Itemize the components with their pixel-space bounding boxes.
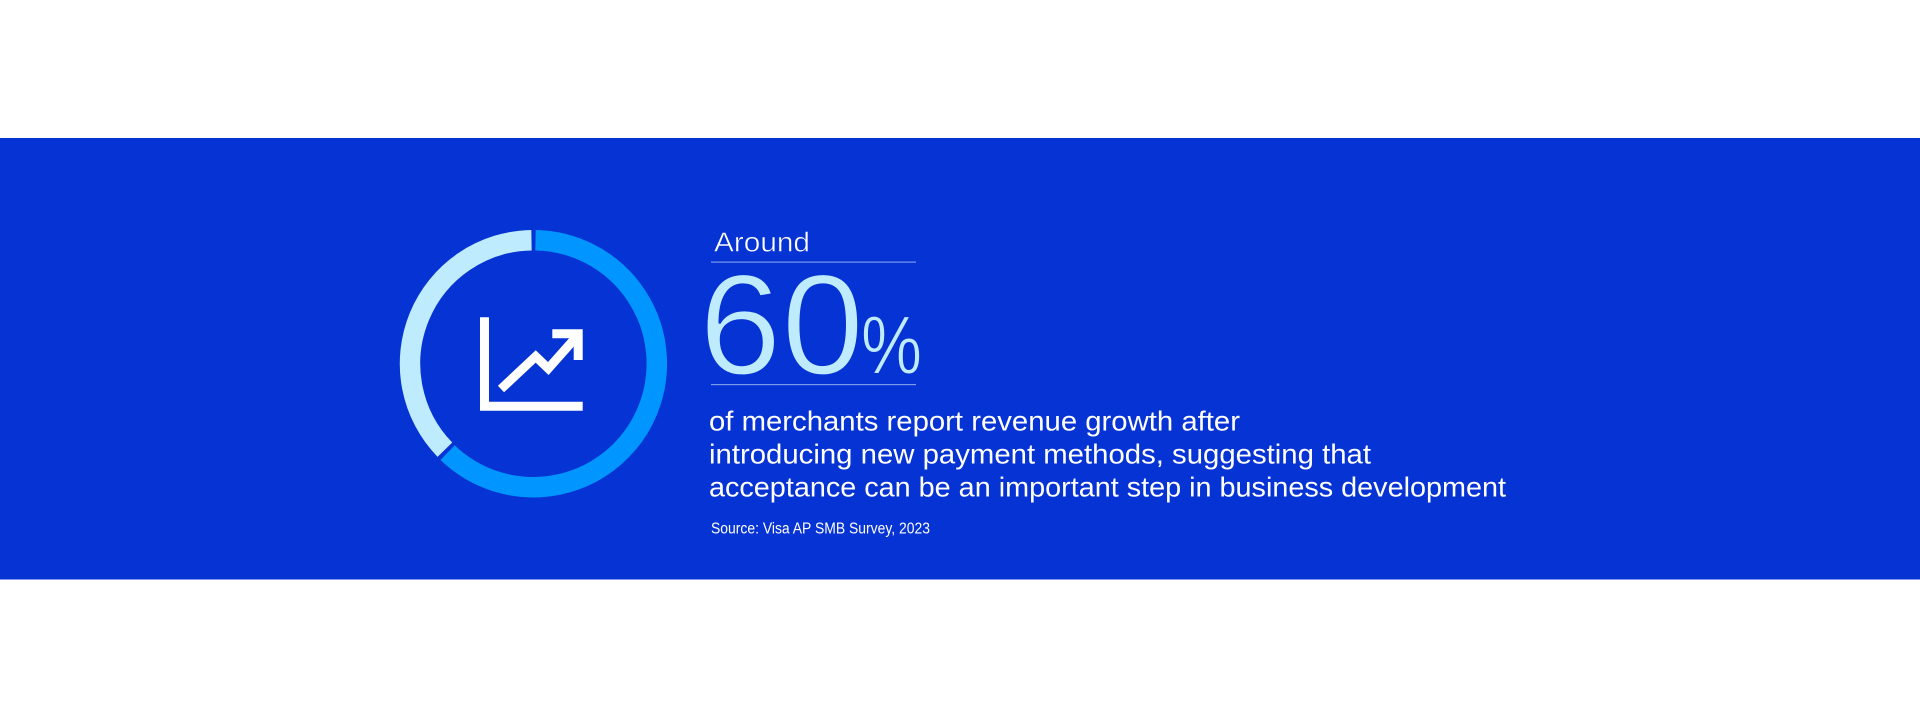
source note: Source: Visa AP SMB Survey, 2023 — [711, 520, 930, 537]
donut chart: 60 percent ring — [410, 240, 657, 487]
description text — [709, 406, 1506, 502]
text: Around: Around — [714, 227, 810, 258]
icon trend line — [501, 335, 578, 389]
big number: 60: 60 — [699, 246, 864, 405]
percent sign: % — [861, 298, 922, 392]
description line 1: of merchants report revenue growth after — [709, 406, 1240, 437]
icon arrowhead — [552, 334, 578, 360]
ring segment: 60 percent — [448, 240, 657, 487]
bottom rule — [711, 384, 916, 385]
ring segment: remainder — [410, 240, 532, 450]
description line 3: acceptance can be an important step in business development — [709, 472, 1506, 502]
description line 2: introducing new payment methods, suggesting that — [709, 438, 1371, 470]
icon axes — [484, 317, 583, 406]
icon: growth chart with arrow — [484, 317, 583, 406]
panel: blue band — [0, 138, 1920, 580]
top rule — [711, 262, 916, 263]
